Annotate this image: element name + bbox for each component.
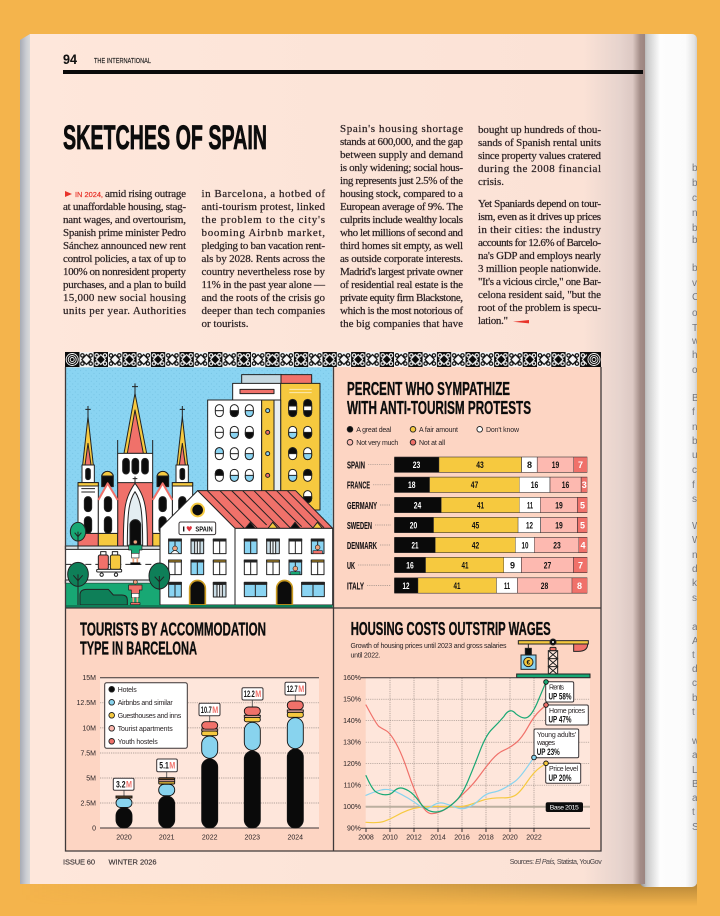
heading: TYPE IN BARCELONA [80,637,197,658]
article text column 1: purchases, and a plan to build [63,279,186,291]
plot grid and axes: 150% [343,697,361,704]
plot grid and axes: 2018 [478,834,494,842]
row: UK: UK [347,561,355,572]
legend: Guesthouses and inns [118,713,182,720]
icon: left trees [68,522,88,605]
heading [80,619,266,658]
next page clipped letters: s [692,593,697,604]
next page clipped letters: b [692,436,698,447]
plot grid and axes: 110% [344,783,361,790]
row: UK: 16 [406,560,414,570]
article text column 4: celona resident said, "but the [478,289,601,301]
plot grid and axes: 2008 [358,834,374,842]
article text column 4: root of the problem is specu- [478,302,601,314]
bar 2022 [199,703,220,828]
article text column 3: as outside corporate interests. [340,253,463,265]
callout: rents [544,680,574,702]
next page clipped letters: o [692,308,698,319]
plot background and axes: 2021 [159,834,175,842]
row: Germany: GERMANY [347,501,377,512]
next page clipped letters: v [692,278,697,289]
bar 2023 [242,688,263,828]
sign: I love Spain: SPAIN [195,524,213,533]
article text column 1: Spanish prime minister Pedro [63,227,186,239]
article text column 3: the big companies that have [340,318,463,330]
article text column 3: between supply and demand [340,149,464,161]
article text column 2: the problem to the city's [202,214,325,226]
footer left [63,858,156,867]
article text column 4: since property values cratered [478,150,602,162]
row: UK: 7 [578,560,583,570]
icon: townhouse [160,491,333,605]
plot grid and axes: 90% [347,826,361,833]
panel: Barcelona illustration [65,367,333,608]
row: Sweden [347,517,587,533]
plot grid and axes: 100% [343,804,361,811]
bar 2024: 12.7 [287,684,298,694]
row: Spain: 43 [476,460,484,470]
plot grid and axes: 2010 [382,834,398,842]
next page clipped letters: t [692,650,695,661]
next page clipped letters: b [692,693,698,704]
line: home prices [366,705,546,814]
row: Denmark [347,537,587,553]
row: Sweden: 20 [410,520,417,530]
left page edge [20,34,30,884]
bar 2022: 10.7 [201,705,212,715]
row: France: 3 [582,480,587,490]
next page clipped letters: L [692,765,698,776]
next page clipped letters: n [692,422,698,433]
legend: Not very much [356,440,398,447]
row: France: 16 [562,480,569,490]
row: Germany: 41 [477,500,484,510]
next page clipped letters: d [692,664,698,675]
article text column 2: 11% in the past year alone — [202,279,326,291]
next page clipped letters: b [692,263,698,274]
row: Spain: 23 [413,460,420,470]
panel: housing costs [334,608,600,850]
next page clipped letters: C [692,292,699,303]
icon: tourist red shirt [129,580,142,605]
article text column 3: ing represents just 2.5% of the [340,175,463,187]
bar 2023: 12.2 [244,689,255,699]
plot background and axes: 2020 [116,834,132,842]
article text column 3: stands at 600,000, and the gap [340,136,464,148]
next page clipped letters: a [692,793,698,804]
article text column 4: lation." [478,315,508,327]
next page clipped letters: w [691,336,700,347]
row: Denmark: 10 [522,540,528,550]
row: Denmark: 23 [553,540,561,550]
article text column 3: housing stock, compared to a [340,188,463,200]
legend: A great deal [356,427,392,434]
row: UK: 27 [544,560,551,570]
next page clipped letters: W [692,521,702,532]
callout: home prices: UP 47% [548,714,572,724]
row: Italy [347,578,587,594]
heading [347,378,531,418]
article text column 1: IN 2024, [75,190,103,199]
article text column 1: Sánchez announced new rent [63,240,186,252]
page header: 94 [63,52,77,67]
bar 2024 [285,682,306,828]
row: France: 16 [531,480,538,490]
next page clipped letters: W [692,535,702,546]
article text column 3: which is the most notorious of [340,305,463,317]
bar 2021: M [169,761,175,771]
next page clipped letters: o [692,365,698,376]
line: young adults wages [366,757,534,809]
next page clipped letters: n [692,550,698,561]
bar 2024: M [298,684,304,694]
row: Germany: 19 [555,500,563,510]
article text column 3 [340,123,464,330]
plot grid and axes: 160% [343,675,361,682]
article text column 1: 15,000 new social housing [63,292,186,304]
next page clipped letters: A [692,636,699,647]
row: Sweden: 19 [555,520,563,530]
legend: Youth hostels [118,739,158,746]
next page clipped letters: b [692,235,698,246]
next page clipped letters: n [692,208,698,219]
row: UK: 41 [462,560,468,570]
article text column 1: units per year. Authorities [63,305,186,317]
callout: base 2015: Base 2015 [550,805,579,812]
callout: price level: Price level [549,766,578,773]
plot background and axes: 5M [86,775,96,782]
icon: crane: € [526,660,530,667]
row: Sweden: 5 [580,520,585,530]
row: Italy: 11 [504,581,510,591]
right page edge [640,30,720,890]
row: Germany [347,497,587,513]
panel: sympathy chart [334,367,600,608]
legend [347,426,520,447]
line: price level [366,763,546,823]
row: Germany: 24 [414,500,421,510]
plot background and axes: 2024 [288,834,303,842]
page shadow [143,884,697,903]
article text column 4: bought up hundreds of thou- [478,124,601,136]
article text column 2: pledging to ban vacation rent- [202,240,325,252]
article text column 4: 3 million people nationwide. [478,263,601,275]
row: Sweden: SWEDEN [347,521,372,532]
next page clipped letters: a [692,750,698,761]
next page clipped letters: h [692,350,698,361]
next page clipped letters: t [692,807,695,818]
row: France: 47 [471,480,478,490]
plot background and axes: 0 [92,825,96,832]
row: Germany: 11 [527,500,533,510]
legend: Not at all [419,440,445,447]
bar 2021 [157,759,177,828]
article text column 4: Yet Spaniards depend on tour- [478,198,601,210]
row: Spain: 19 [552,460,559,470]
subtitle: Growth of housing prices until 2023 and gross salaries [350,643,507,650]
article text column 3: European average of 9%. The [340,201,463,213]
article text column 2: in Barcelona, a hotbed of [202,188,325,200]
page header: THE INTERNATIONAL [94,58,151,65]
plot grid and axes: 2014 [430,834,446,842]
next page clipped letters: w [691,736,700,747]
heading: PERCENT WHO SYMPATHIZE [347,378,510,399]
plot background and axes: 10M [82,725,96,732]
next page clipped letters: d [692,564,698,575]
article text column 1: control policies, a tax of up to [63,253,186,265]
bar 2021: 5.1 [159,761,169,771]
next page clipped letters: b [692,163,698,174]
article text column 2: country nevertheless rose by [202,266,326,278]
icon: luggage [97,552,122,576]
row: France [347,477,587,493]
next page clipped letters: f [692,480,695,491]
sign: I love Spain: I [182,524,185,533]
article text column 1 [63,188,186,317]
plot grid and axes: 120% [343,761,361,768]
sign: I love Spain [179,522,216,535]
plot grid and axes: 2016 [454,834,470,842]
article text column 1: at unaffordable housing, stag- [63,201,186,213]
legend: Don't know [486,427,520,434]
row: Denmark: DENMARK [347,541,377,552]
panel: tourists by accommodation [66,608,333,850]
plot grid and axes: 2022 [526,834,542,842]
row: Spain: 8 [527,460,532,470]
article text column 3: private equity firm Blackstone, [340,292,463,304]
article text column 2: booming Airbnb market, [202,227,325,239]
subtitle: until 2022. [350,652,381,660]
plot background and axes: 2022 [202,834,218,842]
bar 2020: M [126,780,132,790]
row: Sweden: 12 [526,520,533,530]
callout: home prices: Home prices [549,708,586,715]
panel frames [66,367,601,851]
row: Italy: 28 [541,581,548,591]
callout: price level [544,761,581,783]
article text column 3: of residential real estate is the [340,279,463,291]
article text column 2: and the roots of the crisis go [202,292,326,304]
plot grid and axes: 2020 [502,834,518,842]
article text column 4: ism, even as it drives up prices [478,211,601,223]
plot grid and axes: 130% [343,740,361,747]
article text column 1: nant wages, and overtourism, [63,214,186,226]
article text column 4: crisis. [478,176,504,188]
next page clipped letters: u [692,450,698,461]
sources: Sources: El País, Statista, YouGov [510,859,602,866]
row: Italy: ITALY [347,581,364,592]
page header [63,52,643,74]
article text column 4: in their cities: the industry [478,224,602,236]
row: France: 18 [408,480,416,490]
main page [30,34,645,884]
row: Spain [347,457,587,473]
article text column 3: Spain's housing shortage [340,123,463,135]
next page clipped letters: a [692,622,698,633]
plot background and axes: 2023 [245,834,260,842]
icon: tourist green shirt [129,540,142,565]
bar 2020: 3.2 [116,780,126,790]
next page clipped letters [691,163,702,833]
article text column 2: anti-tourism protest, linked [202,201,326,213]
article text column 4: during the 2008 financial [478,163,601,175]
article text column 2: deeper than tech companies [202,305,325,317]
next page clipped letters: t [692,707,695,718]
footer left: ISSUE 60 [63,858,95,867]
article text column 3: is only widening; social hous- [340,162,463,174]
plot background and axes: 2.5M [80,800,96,807]
next page clipped letters: b [692,223,698,234]
legend: Airbnbs and similar [118,700,173,707]
article text column 3: who let millions of second and [340,227,464,239]
next page clipped letters: T [692,323,698,334]
legend [105,683,187,748]
bar 2023: M [255,689,261,699]
next page clipped letters: f [692,407,695,418]
article text column 3: third homes sit empty, as well [340,240,463,252]
plot grid and axes: 140% [343,718,361,725]
row: France: FRANCE [347,481,370,492]
street [65,546,162,605]
row: Spain: 7 [578,460,583,470]
heading: HOUSING COSTS OUTSTRIP WAGES [351,618,551,639]
footer left: WINTER 2026 [108,858,156,867]
icon: right tree [149,563,170,590]
row: Denmark: 42 [472,540,479,550]
article text column 2 [202,188,326,330]
callout: rents: Rents [549,684,564,692]
line: rents [366,682,546,812]
next page clipped letters: c [692,193,697,204]
next page clipped letters: c [692,678,697,689]
callout: young adults wages: Young adults' [537,732,576,739]
next page clipped letters: S [692,822,699,833]
article text column 4: sands of Spanish rental units [478,137,601,149]
icon: crane [517,639,590,678]
plot grid and axes [343,675,590,842]
next page clipped letters: B [692,393,699,404]
row: UK: 9 [510,560,515,570]
callout: young adults wages: UP 23% [537,747,560,757]
title: SKETCHES OF SPAIN [63,119,267,157]
next page clipped letters: B [692,779,699,790]
article text column 3: culprits include wealthy locals [340,214,463,226]
plot grid and axes: 2012 [406,834,422,842]
icon: cathedral [78,383,193,546]
row: UK [347,557,587,573]
row: Italy: 12 [402,581,410,591]
plot background and axes: 7.5M [80,750,96,757]
subtitle [350,643,507,660]
legend: Hotels [118,687,137,694]
row: Spain: SPAIN [347,460,365,472]
decorative tile band [65,352,601,367]
next page clipped letters: c [692,465,697,476]
legend: Tourist apartments [118,726,173,733]
row: Denmark: 4 [580,540,586,550]
article text column 1: 100% on nonresident property [63,266,186,278]
row: Italy: 8 [577,581,582,591]
callout: rents: UP 58% [548,691,572,701]
callout: price level: UP 20% [548,773,572,783]
article text column 2: als by 2028. Rents across the [202,253,325,265]
article text column 4: na's GDP and employs nearly [478,250,602,262]
plot background and axes: 15M [82,675,96,682]
article text column 4: accounts for 12.6% of Barcelo- [478,237,601,249]
article text column 1: amid rising outrage [105,188,186,200]
row: Sweden: 45 [472,520,479,530]
plot background and axes: 12.5M [77,700,96,707]
legend: A fair amount [419,427,458,434]
line chart series [366,682,546,823]
callout: young adults wages: wages [536,740,556,747]
sign: I love Spain: ♥ [186,524,193,533]
row: Denmark: 21 [412,540,418,550]
heading: WITH ANTI-TOURISM PROTESTS [347,397,531,418]
bar 2022: M [212,705,218,715]
row: Germany: 5 [580,500,585,510]
bar 2020 [113,778,134,828]
article text column 3: Madrid's largest private owner [340,266,463,278]
callout: home prices [544,703,588,725]
heading: TOURISTS BY ACCOMMODATION [80,619,266,640]
article text column 2: or tourists. [202,318,249,330]
article text column 4: "It's a vicious circle," one Bar- [478,276,601,288]
article text column 4 [478,124,602,327]
plot background and axes [77,675,319,842]
next page clipped letters: k [692,578,698,589]
icon: apartment towers [208,375,320,510]
next page clipped letters: b [692,178,698,189]
callout: young adults wages [532,729,579,760]
callout: base 2015 [546,802,583,812]
row: Italy: 41 [454,581,460,591]
next page clipped letters: s [692,494,697,505]
